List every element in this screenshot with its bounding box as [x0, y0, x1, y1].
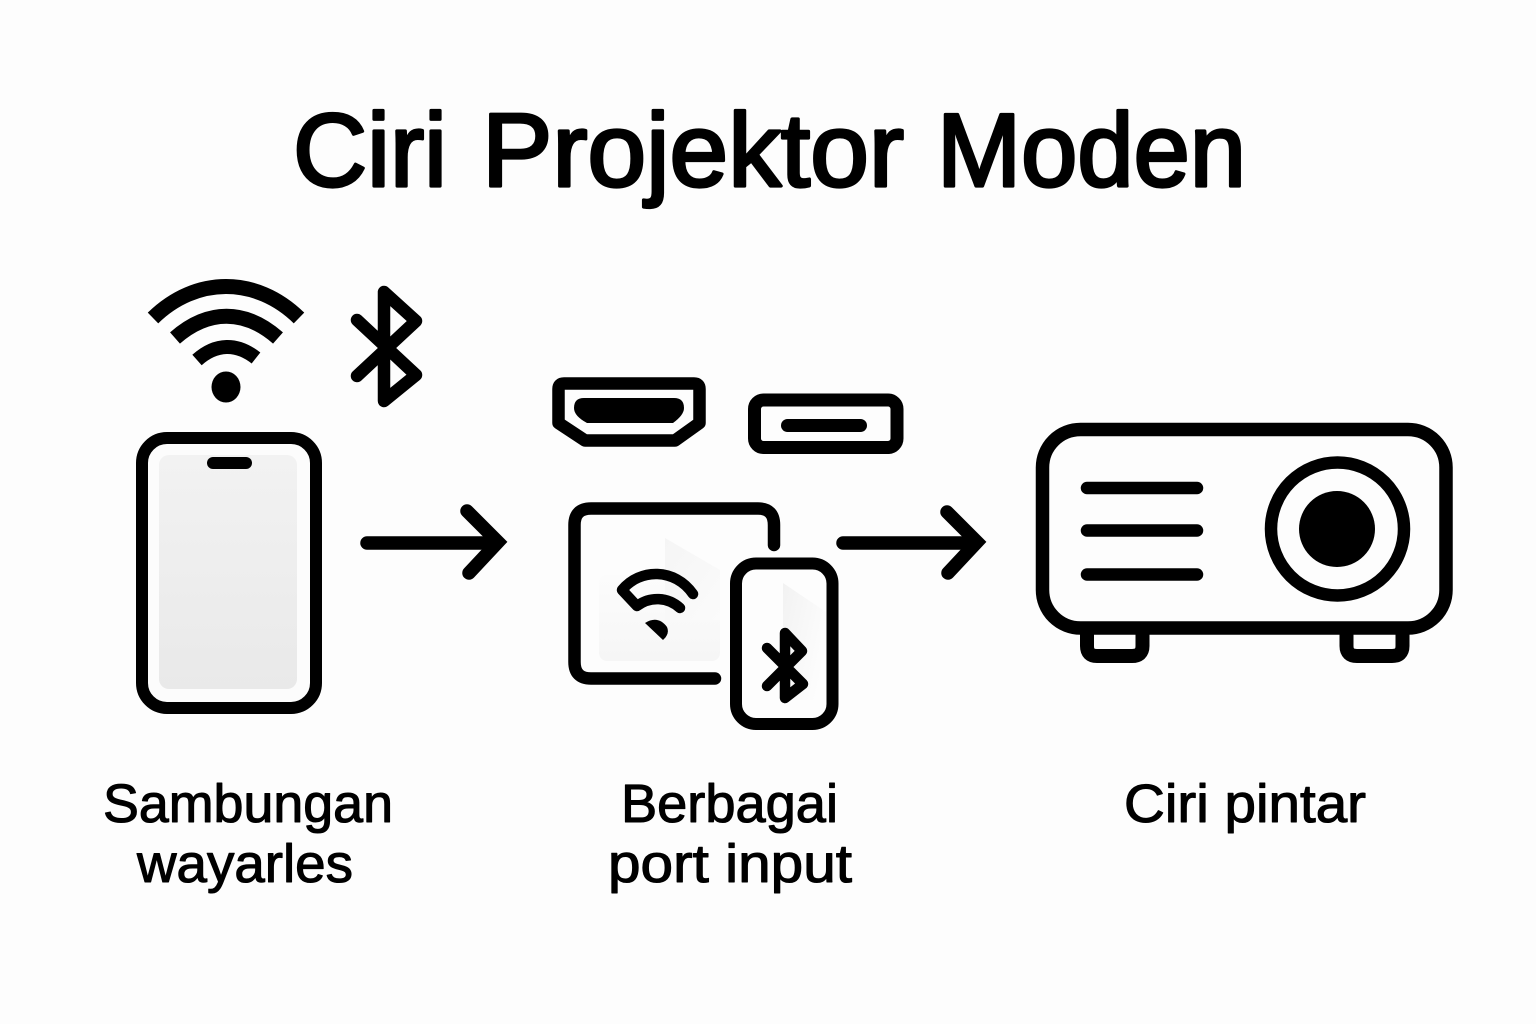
icon: projector — [1042, 430, 1446, 656]
icon: small bluetooth — [767, 633, 803, 698]
label: input ports — [608, 774, 852, 894]
label: wireless connection — [103, 774, 393, 894]
icon: smartphone — [142, 438, 316, 708]
label: smart features: Ciri pintar — [1124, 774, 1366, 834]
screen outline — [574, 508, 774, 678]
icon: small phone — [736, 564, 832, 724]
arrow: phone to ports — [367, 511, 498, 573]
arrow: ports to projector — [843, 512, 977, 573]
icon: USB port — [754, 400, 897, 448]
panel: faint wifi backdrop — [599, 538, 720, 661]
label: input ports: Berbagai — [621, 774, 838, 834]
label: wireless connection: Sambungan — [103, 774, 393, 834]
icon: wifi signal — [153, 286, 299, 402]
title: Moden — [937, 93, 1246, 209]
icon: small wifi — [622, 574, 693, 640]
icon: screen with wifi and phone with bluetooth — [574, 508, 832, 724]
title: Ciri — [293, 93, 447, 209]
label: wireless connection: wayarles — [136, 834, 353, 894]
icon: bluetooth — [357, 292, 416, 401]
icon: HDMI port — [558, 384, 700, 440]
title — [293, 93, 1246, 209]
title: Projektor — [482, 93, 904, 209]
label: input ports: port input — [608, 834, 852, 894]
